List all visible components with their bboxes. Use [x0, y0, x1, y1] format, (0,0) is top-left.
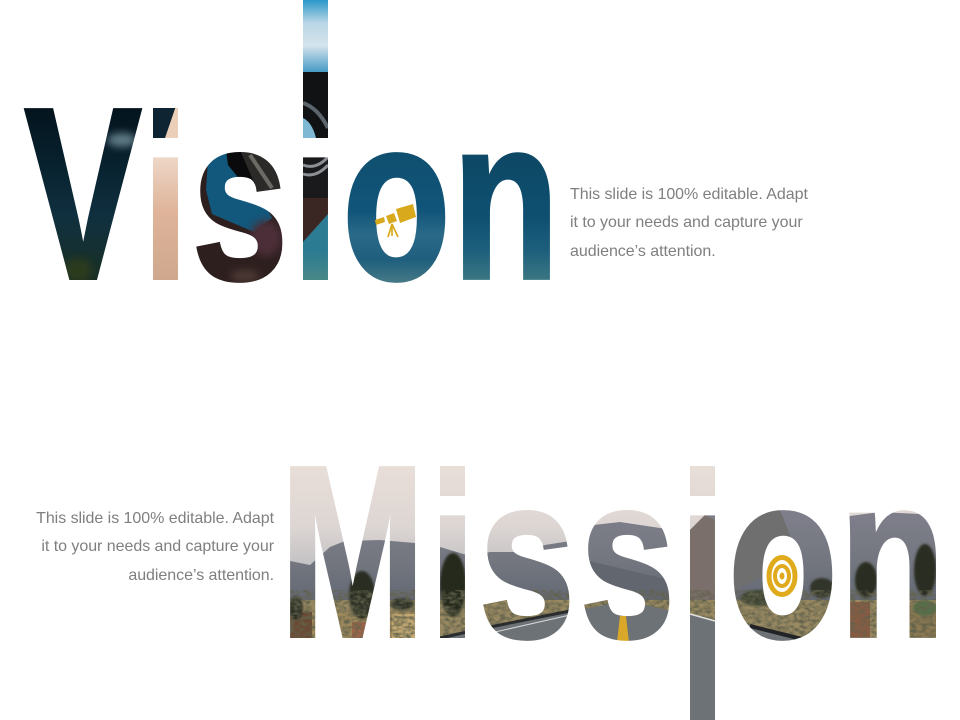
- text block: mission description: audience’s attention.: [128, 566, 274, 584]
- letter V fill: [24, 108, 142, 280]
- text block: mission description: it to your needs and capture your: [41, 538, 274, 555]
- desert scrub: [285, 544, 940, 645]
- sky: [290, 466, 919, 565]
- text block: vision description: [570, 186, 808, 260]
- text block: vision description: audience’s attention.: [570, 242, 716, 260]
- letter o fill: blurred teal water: [348, 152, 446, 283]
- scrub texture: [285, 590, 940, 642]
- letter i fill: skin: [153, 108, 178, 280]
- mountains: [290, 510, 936, 600]
- heading: Vision, photo-filled word: [15, 0, 552, 290]
- road: [440, 604, 812, 720]
- letter s fill: hand and lens: [196, 152, 282, 283]
- text block: mission description: This slide is 100% editable. Adapt: [36, 510, 274, 526]
- text block: vision description: it to your needs and capture your: [570, 214, 803, 231]
- text block: mission description: [36, 510, 274, 584]
- text block: vision description: This slide is 100% editable. Adapt: [570, 186, 808, 202]
- icon: telescope: [375, 204, 416, 237]
- tall letter i fill: sky, lens, hand: [303, 0, 328, 280]
- letter n fill: blurred teal water: [460, 148, 552, 284]
- heading: Mission, photo-filled word: [285, 460, 940, 720]
- icon: target: [769, 558, 795, 594]
